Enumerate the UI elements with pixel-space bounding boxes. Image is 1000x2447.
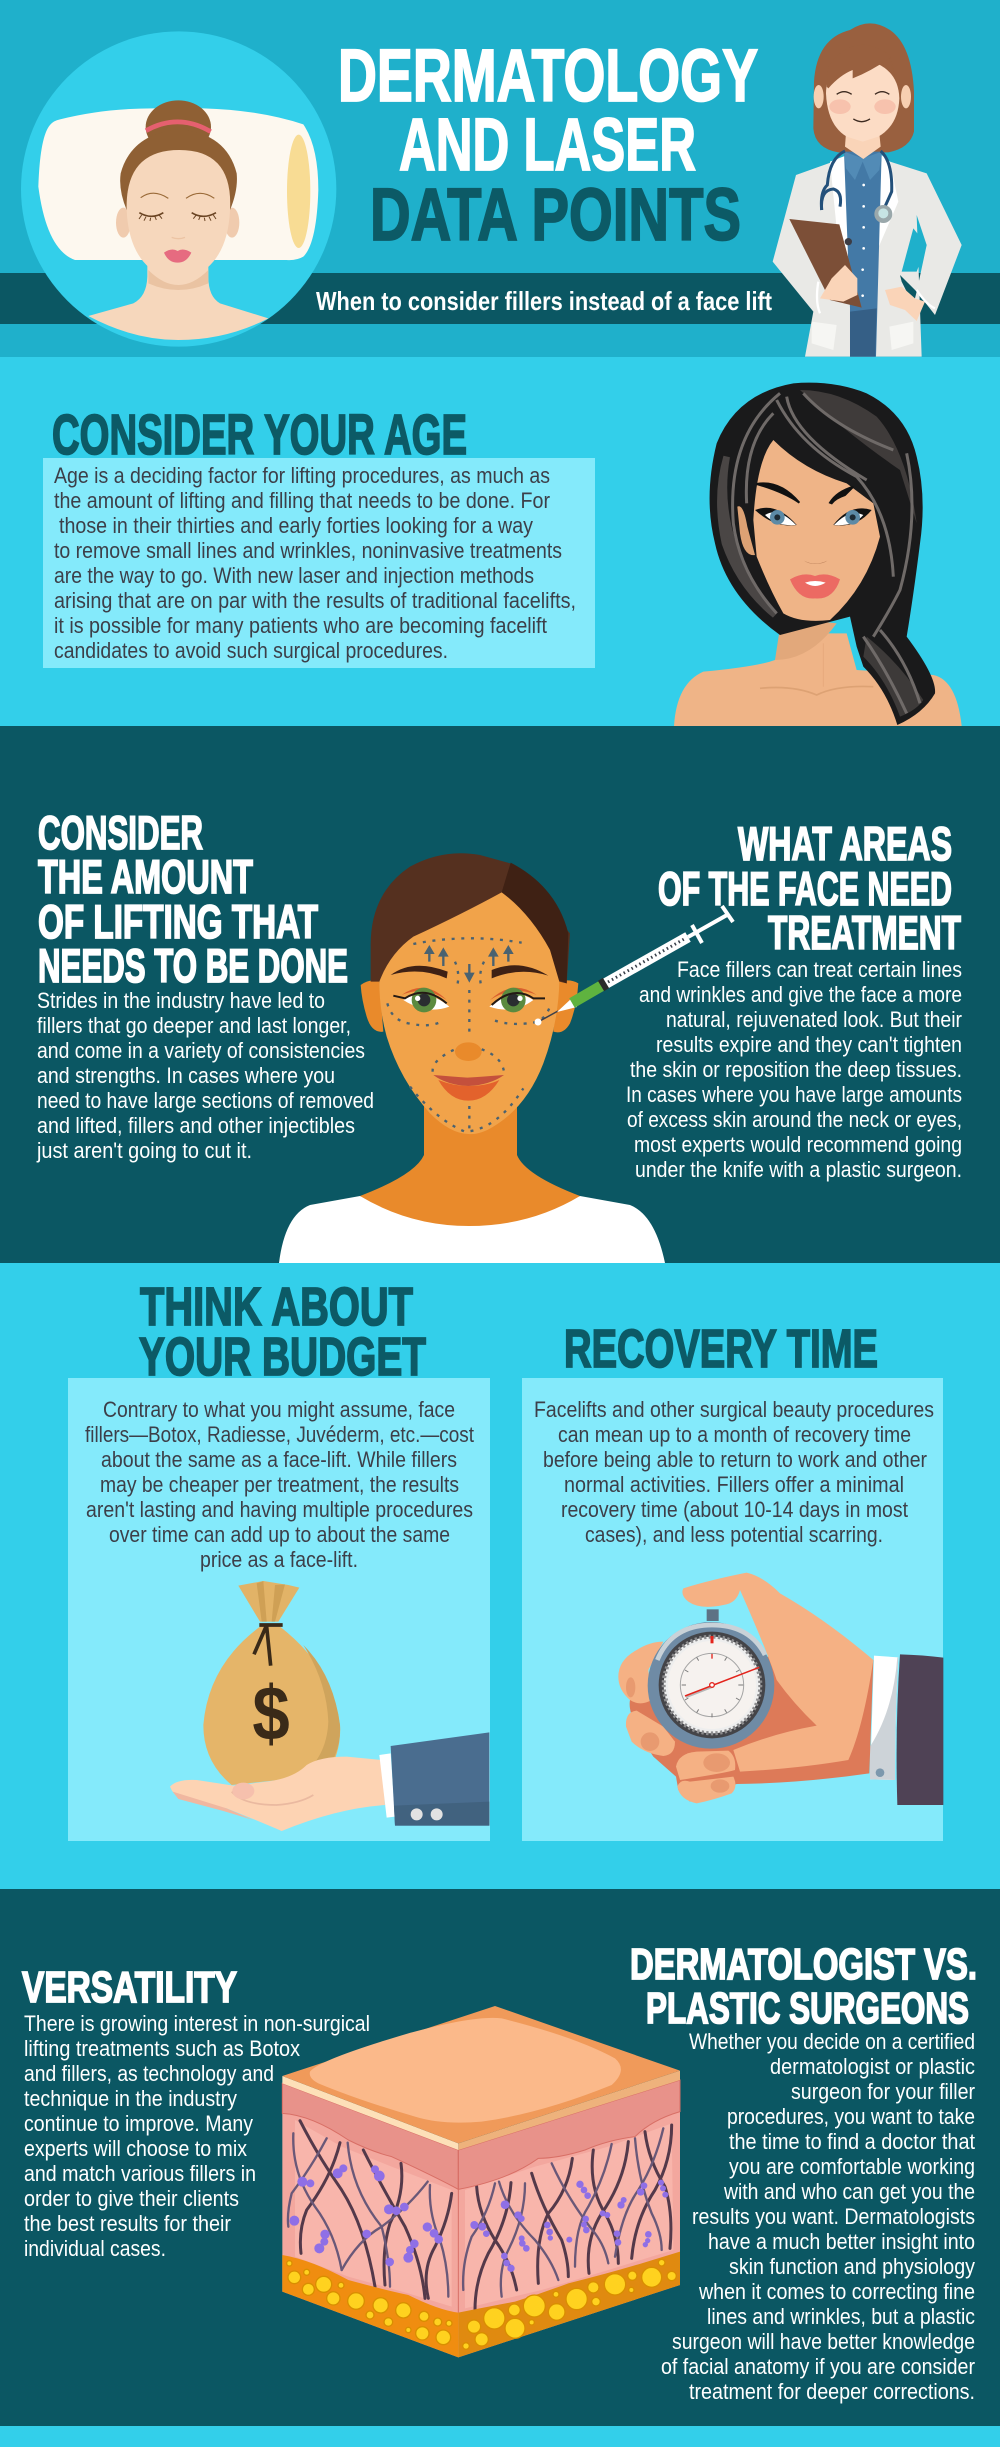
icon: money bag on hand: [170, 1581, 489, 1831]
card: budget: [68, 1378, 490, 1841]
text: lifting: and strengths. In cases where you: [37, 1063, 335, 1088]
panel: budget and recovery: [0, 1263, 1000, 1889]
panel: lifting and treatment areas: [0, 726, 1000, 1263]
text: versatility: There is growing interest in non-surgical: [24, 2011, 370, 2036]
text: treatment areas: results expire and they can't tighten: [656, 1032, 962, 1057]
text: lifting: need to have large sections of removed: [37, 1088, 374, 1113]
text: treatment areas: the skin or reposition the deep tissues.: [630, 1057, 962, 1082]
icon: skin cross-section: [282, 2006, 680, 2357]
text: lifting: fillers that go deeper and last longer,: [37, 1013, 351, 1038]
text box: arising that are on par with the results of traditional facelifts,: [54, 588, 576, 613]
text: budget: [85, 1397, 474, 1572]
text: recovery: before being able to return to work and other: [543, 1447, 927, 1472]
heading: consider the amount of lifting: OF LIFTING THAT: [38, 895, 318, 948]
heading: what areas of the face need treatment: [658, 817, 961, 959]
text: dermatologist vs plastic surgeons: you are comfortable working: [729, 2154, 975, 2179]
text: dermatologist vs plastic surgeons: surgeon for your filler: [791, 2079, 975, 2104]
text: lifting: [36, 988, 374, 1163]
icon: neck: [360, 1100, 580, 1226]
heading: consider the amount of lifting: [38, 806, 348, 992]
footer strip: [0, 2426, 1000, 2447]
text: versatility: technique in the industry: [24, 2086, 237, 2111]
text: budget: over time can add up to about the same: [109, 1522, 450, 1547]
subtitle: When to consider fillers instead of a face lift: [316, 286, 772, 316]
text: recovery: can mean up to a month of recovery time: [558, 1422, 911, 1447]
text: versatility: the best results for their: [24, 2211, 231, 2236]
text: dermatologist vs plastic surgeons: when it comes to correcting fine: [698, 2279, 975, 2304]
text box: those in their thirties and early forties looking for a way: [59, 513, 533, 538]
text: treatment areas: [626, 957, 962, 1182]
icon: sleeping woman on pillow: [21, 31, 336, 347]
text: lifting: and lifted, fillers and other injectibles: [37, 1113, 355, 1138]
text box: [43, 458, 595, 668]
text: recovery: normal activities. Fillers offer a minimal: [564, 1472, 904, 1497]
text: recovery: cases), and less potential scarring.: [585, 1522, 883, 1547]
text box: candidates to avoid such surgical procedures.: [54, 638, 448, 663]
text: treatment areas: under the knife with a plastic surgeon.: [635, 1157, 962, 1182]
text: versatility: individual cases.: [24, 2236, 166, 2261]
text: dermatologist vs plastic surgeons: have a much better insight into: [708, 2229, 975, 2254]
heading: CONSIDER YOUR AGE: [52, 403, 467, 467]
heading: consider the amount of lifting: THE AMOUNT: [38, 850, 253, 903]
text: recovery: recovery time (about 10-14 days in most: [561, 1497, 908, 1522]
text box: it is possible for many patients who are becoming facelift: [54, 613, 547, 638]
card: recovery: [522, 1378, 943, 1841]
text: versatility: and match various fillers in: [24, 2161, 256, 2186]
heading: recovery time: RECOVERY TIME: [564, 1319, 878, 1379]
text: budget: Contrary to what you might assume, face: [103, 1397, 455, 1422]
icon: money bag on hand: $: [252, 1672, 290, 1757]
heading: versatility: VERSATILITY: [22, 1963, 237, 2012]
heading: think about your budget: THINK ABOUT: [140, 1277, 413, 1337]
text: dermatologist vs plastic surgeons: the time to find a doctor that: [729, 2129, 975, 2154]
heading: think about your budget: [139, 1277, 426, 1387]
text: recovery: [534, 1397, 934, 1547]
icon: neck and shirt: [279, 1196, 665, 1263]
text: budget: aren't lasting and having multiple procedures: [86, 1497, 473, 1522]
panel: versatility and dermatologist vs plastic surgeons: [0, 1889, 1000, 2426]
text: lifting: and come in a variety of consistencies: [37, 1038, 365, 1063]
title: [338, 34, 758, 256]
text: versatility: [24, 2011, 370, 2261]
text: treatment areas: most experts would recommend going: [634, 1132, 962, 1157]
text: versatility: continue to improve. Many: [24, 2111, 253, 2136]
icon: face with injection markings: [361, 853, 578, 1134]
heading: think about your budget: YOUR BUDGET: [139, 1327, 426, 1387]
text: treatment areas: Face fillers can treat certain lines: [677, 957, 962, 982]
text: lifting: Strides in the industry have led to: [37, 988, 325, 1013]
icon: syringe: [534, 906, 733, 1026]
text: versatility: lifting treatments such as Botox: [24, 2036, 300, 2061]
text: versatility: experts will choose to mix: [24, 2136, 247, 2161]
text: budget: price as a face-lift.: [200, 1547, 358, 1572]
heading: dermatologist vs plastic surgeons: [630, 1940, 977, 2033]
title: DATA POINTS: [370, 173, 741, 256]
text: budget: fillers—Botox, Radiesse, Juvéderm, etc.—cost: [85, 1422, 474, 1447]
title: DERMATOLOGY: [338, 34, 758, 117]
icon: hand holding stopwatch: [618, 1573, 943, 1805]
panel: consider your age: [0, 357, 1000, 726]
text: dermatologist vs plastic surgeons: treatment for deeper corrections.: [689, 2379, 975, 2404]
text: treatment areas: natural, rejuvenated look. But their: [666, 1007, 962, 1032]
text: versatility: order to give their clients: [24, 2186, 239, 2211]
text box: to remove small lines and wrinkles, noninvasive treatments: [54, 538, 562, 563]
text box: are the way to go. With new laser and injection methods: [54, 563, 534, 588]
icon: woman with black hair: [674, 383, 962, 726]
text: treatment areas: and wrinkles and give the face a more: [639, 982, 962, 1007]
text: versatility: and fillers, as technology and: [24, 2061, 274, 2086]
text box: Age is a deciding factor for lifting procedures, as much as: [54, 463, 550, 488]
heading: consider the amount of lifting: CONSIDER: [38, 806, 203, 859]
panel: header: [0, 0, 1000, 357]
title: AND LASER: [399, 103, 696, 186]
text: dermatologist vs plastic surgeons: dermatologist or plastic: [770, 2054, 975, 2079]
icon: doctor: [773, 23, 962, 357]
text: budget: about the same as a face-lift. While fillers: [101, 1447, 457, 1472]
text box: the amount of lifting and filling that needs to be done. For: [54, 488, 550, 513]
text: dermatologist vs plastic surgeons: [661, 2029, 975, 2404]
text: budget: may be cheaper per treatment, the results: [100, 1472, 459, 1497]
text: recovery: Facelifts and other surgical beauty procedures: [534, 1397, 934, 1422]
text: dermatologist vs plastic surgeons: skin function and physiology: [729, 2254, 975, 2279]
subtitle band: [0, 273, 1000, 324]
text: lifting: just aren't going to cut it.: [36, 1138, 252, 1163]
heading: consider the amount of lifting: NEEDS TO BE DONE: [38, 939, 348, 992]
